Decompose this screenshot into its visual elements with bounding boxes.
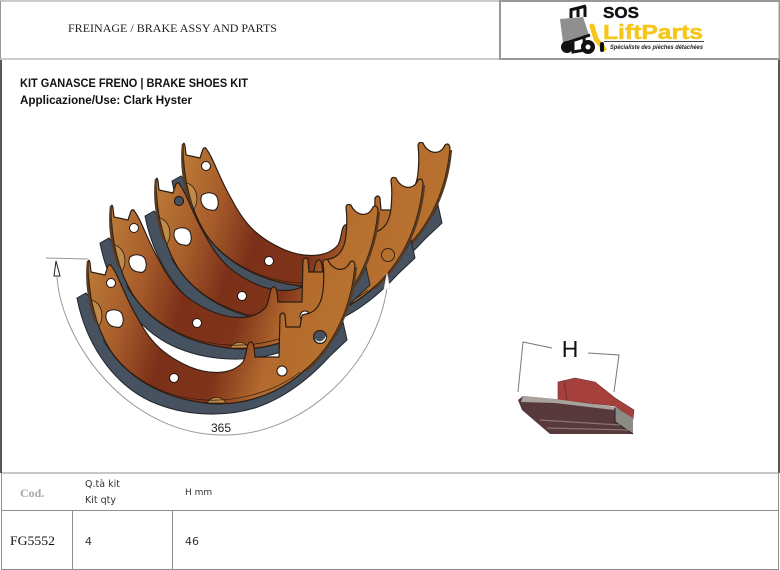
header: Cod.: Cod. (20, 486, 44, 500)
header: kit quantity: Q.tà kit (85, 479, 120, 490)
product heading: KIT GANASCE FRENO | BRAKE SHOES KIT (20, 76, 249, 90)
shoe: back (172, 142, 451, 297)
application text: Applicazione/Use: Clark Hyster (20, 93, 192, 107)
main panel border (1, 60, 779, 473)
shoe: front (77, 259, 356, 414)
logo tagline: Spécialiste des pièches détachées (610, 45, 704, 51)
shoe: third (145, 177, 424, 332)
header panel: category title (0, 1, 500, 59)
metal backing (518, 396, 633, 434)
brake shoes illustration (77, 142, 451, 414)
logo text: SOS: SOS (603, 5, 639, 22)
header: H mm: H mm (185, 488, 212, 498)
table grid (1, 473, 779, 570)
logo underline (604, 41, 704, 42)
dimension lines (518, 342, 619, 392)
dimension arc: 365 (46, 258, 388, 435)
table (1, 473, 779, 570)
shoe: second (100, 204, 379, 359)
value: code: FG5552 (10, 533, 55, 548)
dimension arrow right (384, 273, 390, 289)
title: FREINAGE / BRAKE ASSY AND PARTS (68, 21, 277, 35)
header panel: logo (500, 1, 780, 59)
icon: forklift (560, 6, 604, 54)
detail diagram: H height (518, 336, 634, 434)
dimension label: 365: 365 (211, 421, 231, 435)
H label: H (562, 336, 578, 362)
logo text: LiftParts: LiftParts (603, 22, 703, 44)
friction lining (558, 378, 634, 419)
header: kit quantity: Kit qty (85, 495, 116, 506)
value: H: 46 (185, 535, 199, 548)
value: quantity: 4 (85, 535, 92, 548)
